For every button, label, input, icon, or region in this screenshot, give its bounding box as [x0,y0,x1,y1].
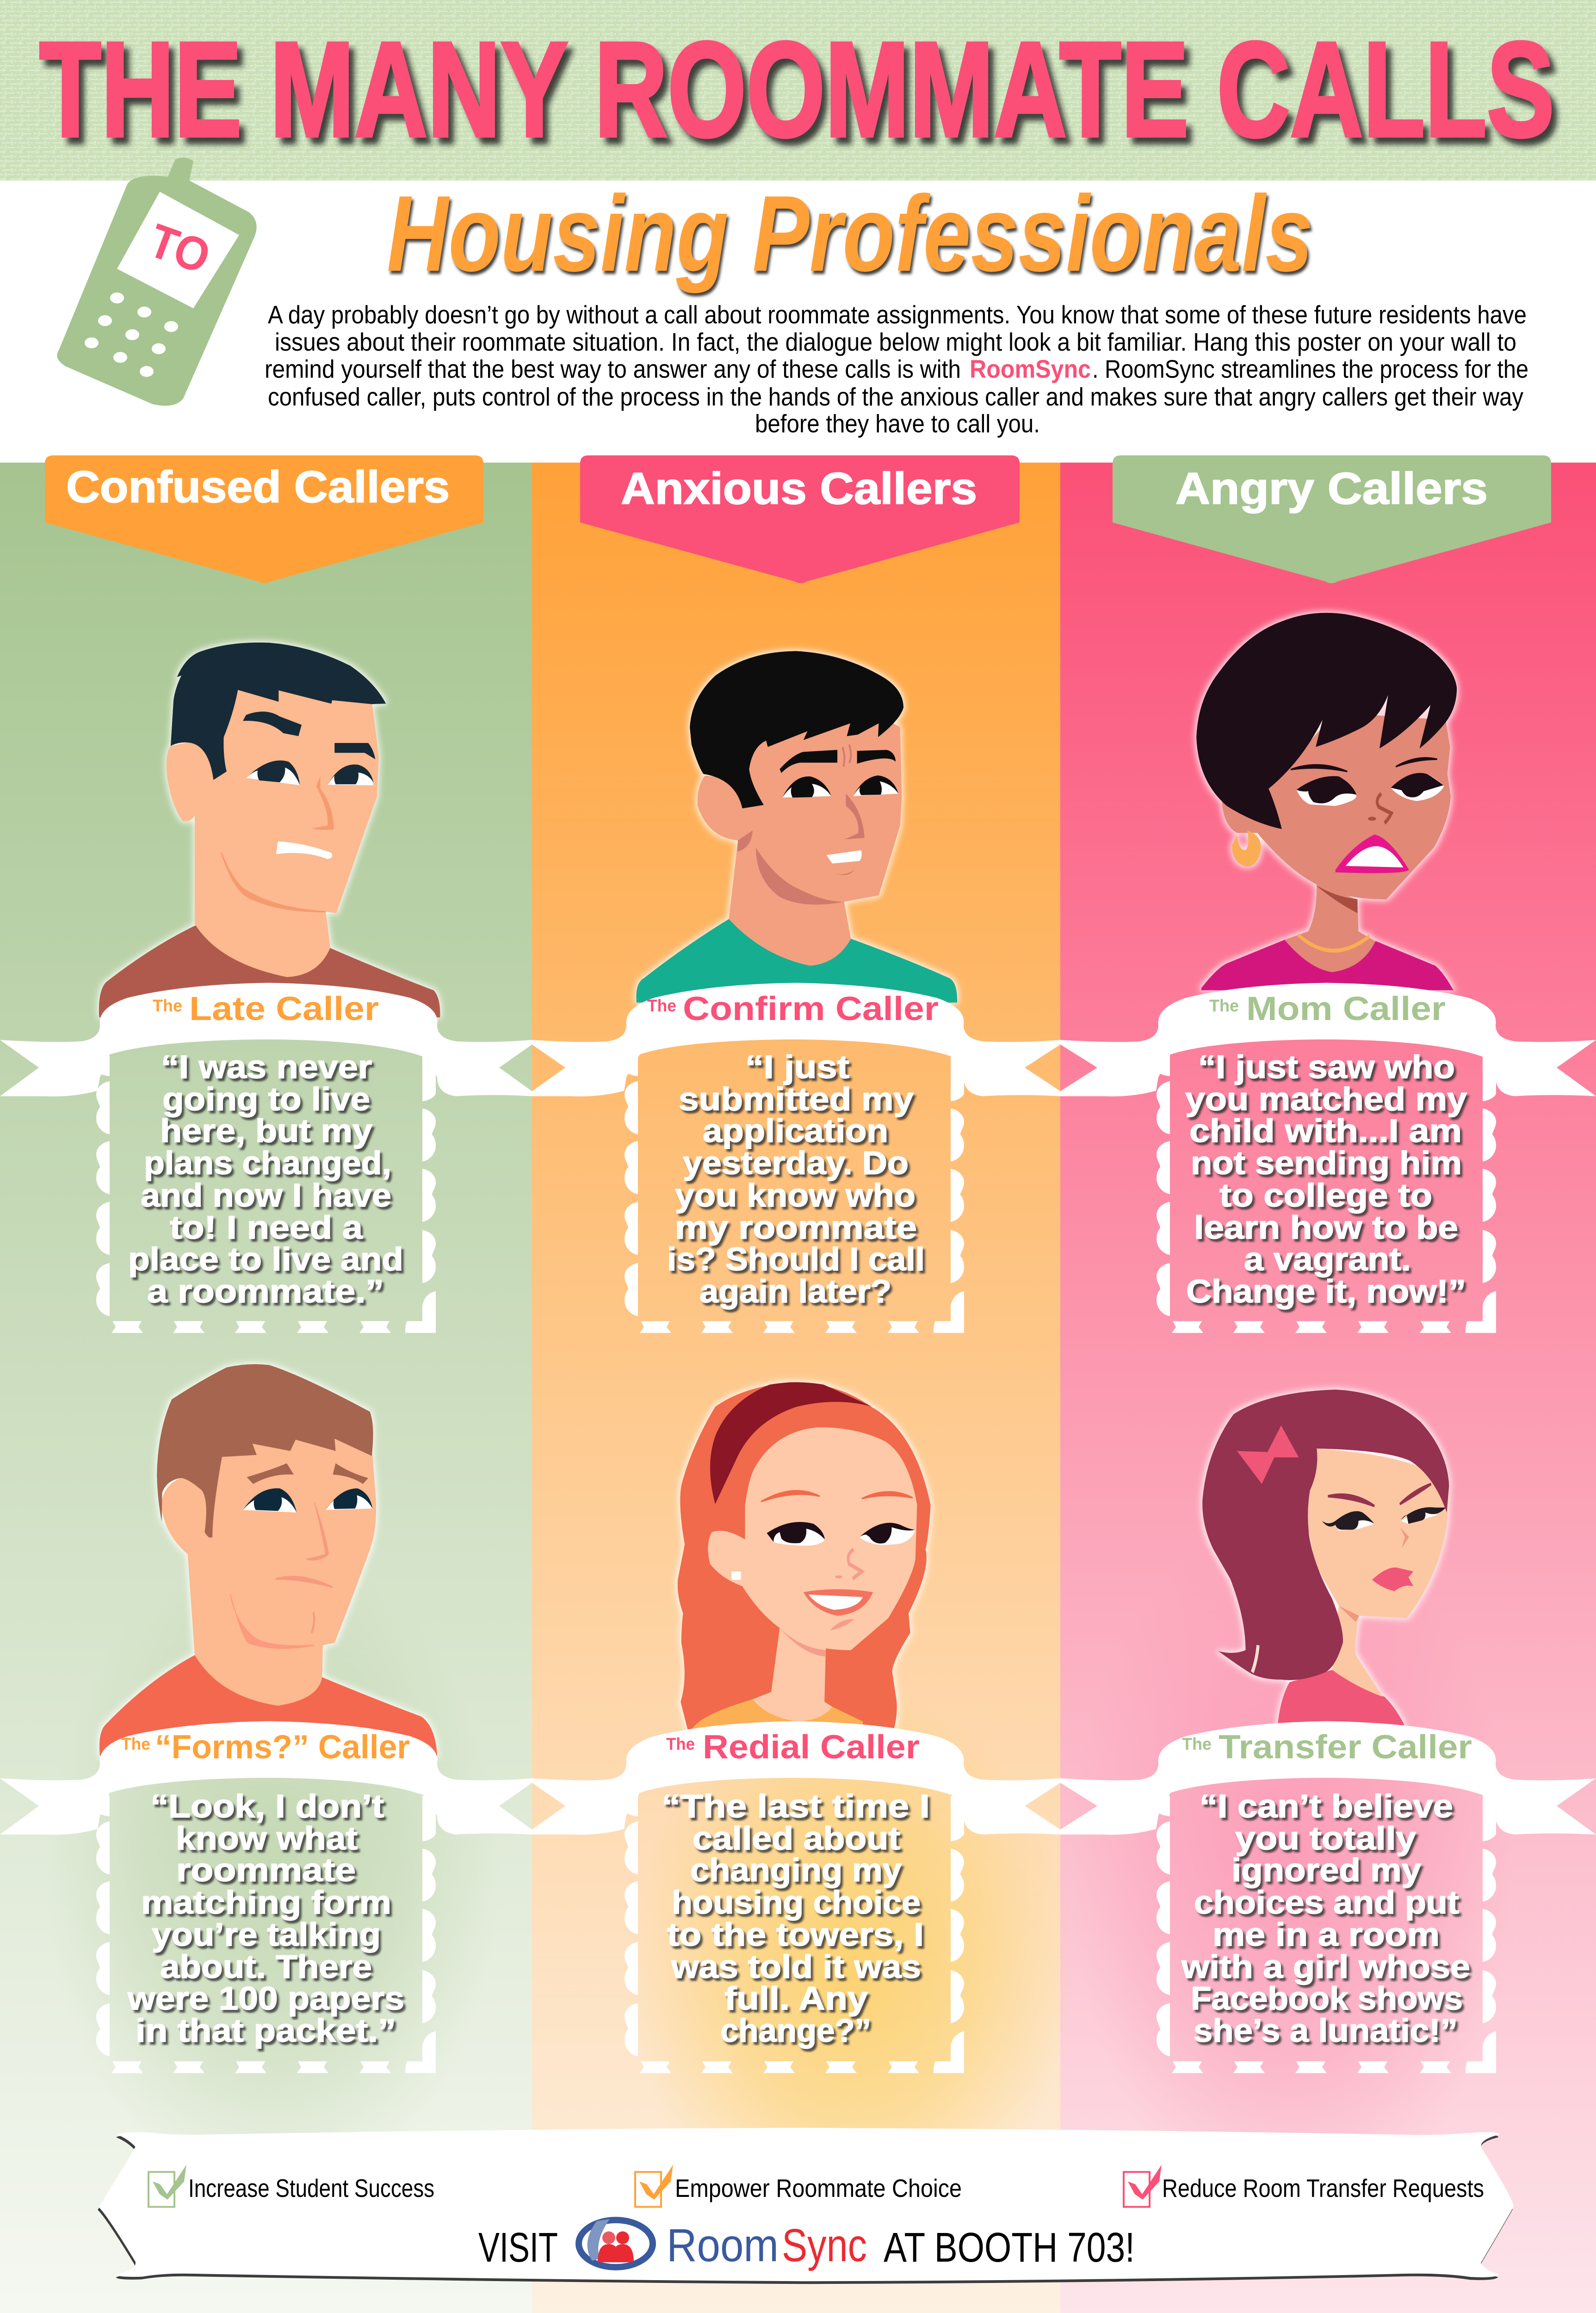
quote: late caller [128,1049,403,1310]
ribbon: transfer caller [1060,1721,1596,1835]
icon: mobile phone: TO [142,214,217,284]
quote: mom caller: you matched my [1185,1081,1467,1118]
ribbon: forms caller [0,1721,532,1835]
name: the forms caller: The [121,1734,150,1753]
banner: angry callers: Angry Callers [1175,464,1488,513]
quote: redial caller: housing choice [672,1884,921,1921]
quote: redial caller [662,1788,930,2049]
frame: forms caller quote [96,1796,436,2073]
text: at booth 703: AT BOOTH 703! [884,2225,1135,2271]
intro paragraph: . RoomSync streamlines the process for the [1092,355,1528,383]
checklist: empower roommate choice [635,2165,962,2207]
quote: forms caller: matching form [141,1884,391,1921]
quote: redial caller: change?” [720,2012,871,2049]
banner: anxious callers: Anxious Callers [621,464,977,513]
banner: confused callers: Confused Callers [66,462,450,512]
quote: late caller: “I was never [161,1049,372,1085]
quote: transfer caller: “I can’t believe [1200,1788,1453,1824]
quote: mom caller: learn how to be [1194,1209,1458,1246]
character: forms caller [99,1364,437,1756]
banner shape [98,2128,1514,2284]
frame: confirm caller quote [625,1056,964,1333]
quote: forms caller: about. There [160,1948,372,1985]
checklist: reduce room transfer requests [1124,2165,1484,2207]
icon: mobile phone [57,158,257,406]
wordmark: roomsync: Room [667,2220,779,2271]
banner: confused callers [45,455,483,583]
quote: forms caller [127,1788,404,2049]
name: the redial caller: Redial Caller [703,1728,920,1766]
quote: mom caller: Change it, now!” [1186,1273,1466,1310]
ribbon: late caller [0,983,532,1096]
quote: forms caller: in that packet.” [136,2012,396,2049]
quote: transfer caller: me in a room [1212,1917,1440,1953]
quote: redial caller: “The last time I [662,1788,930,1824]
checklist: increase student success [148,2165,434,2207]
quote: transfer caller: with a girl whose [1181,1948,1470,1985]
name: the transfer caller: Transfer Caller [1219,1728,1472,1766]
quote: transfer caller: you totally [1235,1820,1416,1857]
quote: transfer caller: she’s a lunatic!” [1194,2012,1458,2049]
character: transfer caller [1202,1390,1449,1732]
frame: redial caller quote [625,1796,964,2073]
intro paragraph: remind yourself that the best way to answer any of these calls is with [265,355,961,383]
column: angry callers background [1060,463,1596,2313]
quote: confirm caller: “I just [745,1049,849,1085]
quote: mom caller: child with...I am [1189,1113,1462,1149]
column: confused callers background [0,463,532,2313]
quote: redial caller: full. Any [724,1980,868,2017]
footer banner [98,2128,1514,2284]
name: the redial caller: The [666,1734,695,1753]
quote: mom caller: “I just saw who [1198,1049,1455,1085]
quote: late caller: a roommate.” [147,1273,384,1310]
glow: forms caller quote [46,1546,500,2200]
ribbon: redial caller [532,1721,1060,1835]
quote: late caller: place to live and [128,1241,403,1278]
quote: confirm caller: yesterday. Do [683,1145,909,1181]
logo: roomsync [579,2219,653,2267]
quote: late caller: going to live [162,1081,370,1118]
quote: confirm caller [667,1049,925,1310]
textured title band [0,0,1596,180]
name: the mom caller: Mom Caller [1246,990,1446,1027]
quote: mom caller: to college to [1219,1177,1432,1214]
quote: transfer caller: ignored my [1231,1852,1421,1889]
quote: forms caller: were 100 papers [127,1980,404,2017]
quote: forms caller: “Look, I don’t [150,1788,384,1824]
wordmark: roomsync [667,2220,867,2271]
quote: forms caller: know what [176,1820,358,1857]
quote: late caller: plans changed, [144,1145,391,1181]
character: late caller [99,643,440,1017]
checklist: increase student success: Increase Student Success [188,2174,434,2202]
quote: mom caller: a vagrant. [1244,1241,1411,1278]
glow: redial caller quote [629,1687,1073,2250]
checklist: reduce room transfer requests: Reduce Room Transfer Requests [1162,2174,1484,2202]
name: the confirm caller: The [647,996,676,1015]
name: the late caller: Late Caller [189,990,379,1027]
ribbon: mom caller [1060,983,1596,1096]
banner: angry callers [1113,455,1551,583]
name: the transfer caller: The [1182,1734,1212,1753]
quote: forms caller: you’re talking [152,1917,381,1953]
quote: confirm caller: again later? [699,1273,891,1310]
name: the forms caller: “Forms?” Caller [155,1728,410,1766]
quote: confirm caller: is? Should I call [667,1241,925,1278]
banner: anxious callers [580,455,1020,583]
quote: late caller: to! I need a [170,1209,363,1246]
quote: mom caller [1185,1049,1467,1310]
quote: transfer caller [1181,1788,1470,2049]
character: redial caller [678,1382,931,1732]
character: mom caller [1196,613,1457,990]
quote: redial caller: to the towers, I [667,1917,924,1953]
text: visit: VISIT [478,2225,558,2271]
quote: confirm caller: application [703,1113,888,1149]
quote: mom caller: not sending him [1191,1145,1462,1181]
name: the mom caller: The [1209,996,1239,1015]
quote: confirm caller: my roommate [675,1209,917,1246]
ribbon: confirm caller [532,983,1060,1096]
frame: late caller quote [96,1056,436,1333]
quote: transfer caller: choices and put [1194,1884,1459,1921]
quote: late caller: and now I have [141,1177,391,1214]
quote: redial caller: called about [693,1820,900,1857]
intro paragraph [265,301,1528,438]
frame: transfer caller quote [1157,1796,1496,2073]
column: anxious callers background [532,463,1060,2313]
name: the late caller: The [153,996,182,1015]
intro paragraph: before they have to call you. [755,409,1040,438]
quote: forms caller: roommate [176,1852,356,1889]
quote: redial caller: changing my [690,1852,902,1889]
quote: late caller: here, but my [160,1113,372,1149]
name: the confirm caller: Confirm Caller [683,990,939,1027]
frame: mom caller quote [1157,1056,1496,1333]
quote: redial caller: was told it was [671,1948,921,1985]
subtitle: Housing Professionals [387,173,1313,294]
intro paragraph: RoomSync [970,355,1091,383]
quote: confirm caller: submitted my [679,1081,914,1118]
quote: transfer caller: Facebook shows [1191,1980,1463,2017]
glow: transfer caller quote [1069,1515,1513,2222]
character: confirm caller [636,651,957,1002]
checklist: empower roommate choice: Empower Roommate Choice [675,2174,962,2202]
wordmark: roomsync: Sync [782,2220,867,2271]
quote: confirm caller: you know who [675,1177,916,1214]
